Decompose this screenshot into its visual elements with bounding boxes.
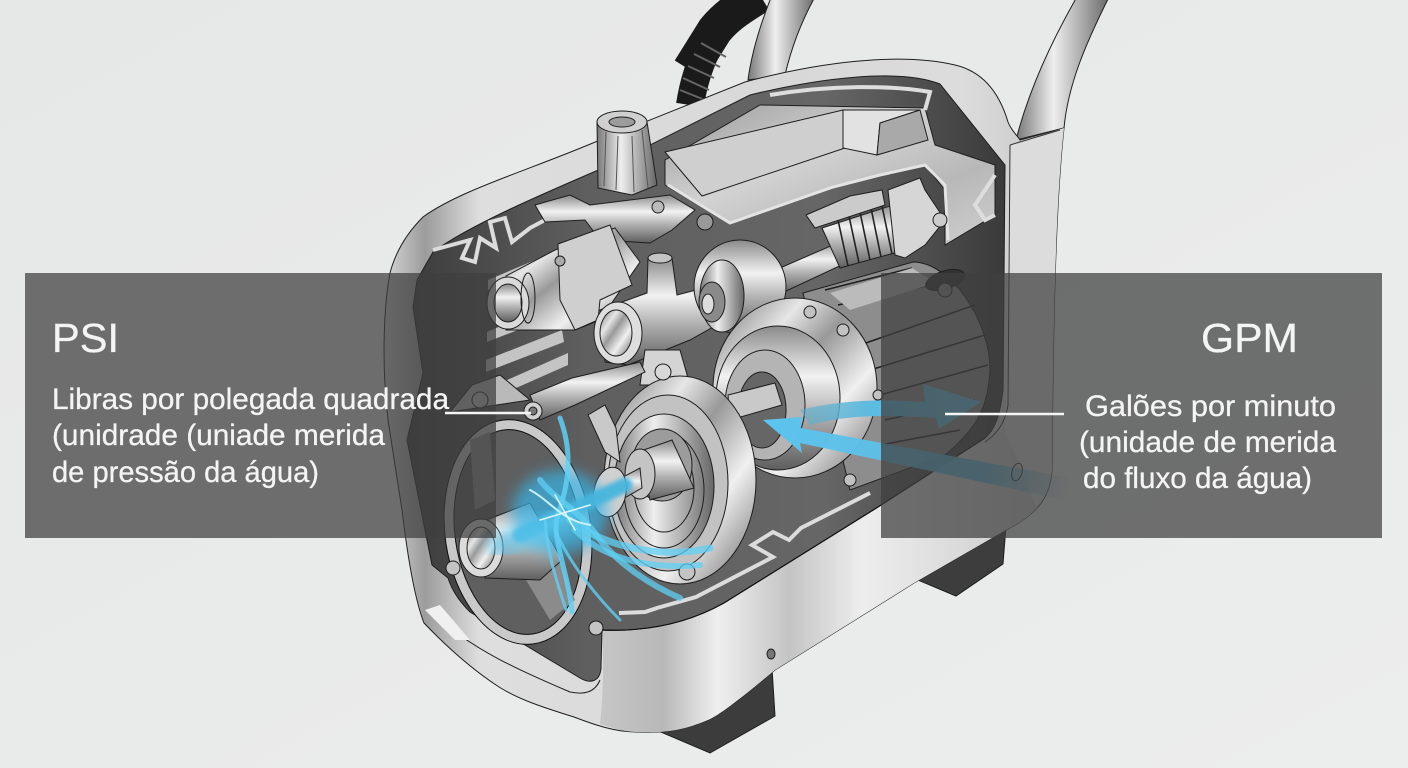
left valve [487,225,640,330]
inflow arrow [763,417,1070,500]
right foot [918,526,1006,596]
housing cylinder [665,110,845,196]
drain screw [1010,462,1024,482]
motor stator [803,262,990,490]
knob valve [535,111,713,243]
right clip [975,175,995,220]
PSI description: (unidrade (uniade merida [52,419,385,452]
GPM description: do fluxo da água) [1083,462,1312,495]
lower frame rail [619,493,870,613]
right pillar [1005,128,1064,506]
water burst in pump [500,418,710,620]
panel: GPM [881,273,1382,538]
GPM description: Galões por minuto [1085,390,1336,423]
return arrow [800,384,981,429]
inlet nozzle [446,503,603,635]
T-pipe [594,253,722,365]
flow arrows [763,384,1070,500]
side screw [767,649,775,659]
pump cover disk [588,350,756,584]
bearing and shaft [694,240,848,334]
top rim highlight [770,87,930,110]
left foot [656,668,775,753]
black hose [680,0,760,105]
PSI description [52,383,449,489]
GPM description: (unidade de merida [1079,426,1336,459]
bottom shell band [600,431,1051,732]
dark cavity [407,76,1005,681]
GPM heading: GPM [1201,315,1298,361]
panel background [25,273,496,538]
left glow jet [500,520,570,545]
spring assembly [806,178,947,268]
upper housing [665,105,995,245]
panel: PSI [25,273,496,538]
shell rim lines [985,130,1060,442]
slots [486,258,568,396]
housing lip highlight [668,165,948,240]
left handle tube [748,0,816,80]
shell ridge lower left [432,612,600,693]
right handle tube [1016,0,1110,140]
GPM description [1079,390,1336,495]
shell highlight lower left [425,605,470,640]
housing box shade [877,110,928,155]
outer shell [384,59,1064,732]
panel background [881,273,1382,538]
mounting ring [430,410,606,654]
PSI description: Libras por polegada quadrada [52,383,449,416]
PSI heading: PSI [52,315,119,361]
shell front edge [602,438,985,630]
leader line: GPM [945,413,1064,415]
strands [530,418,710,620]
PSI description: de pressão da água) [52,456,319,489]
machine illustration [384,0,1110,753]
pressure jet [520,485,625,535]
leader line: PSI [445,412,531,414]
arm with bolt [450,362,645,420]
housing box [843,110,920,155]
shell clip top-left [433,212,560,262]
motor end bell [713,298,883,486]
